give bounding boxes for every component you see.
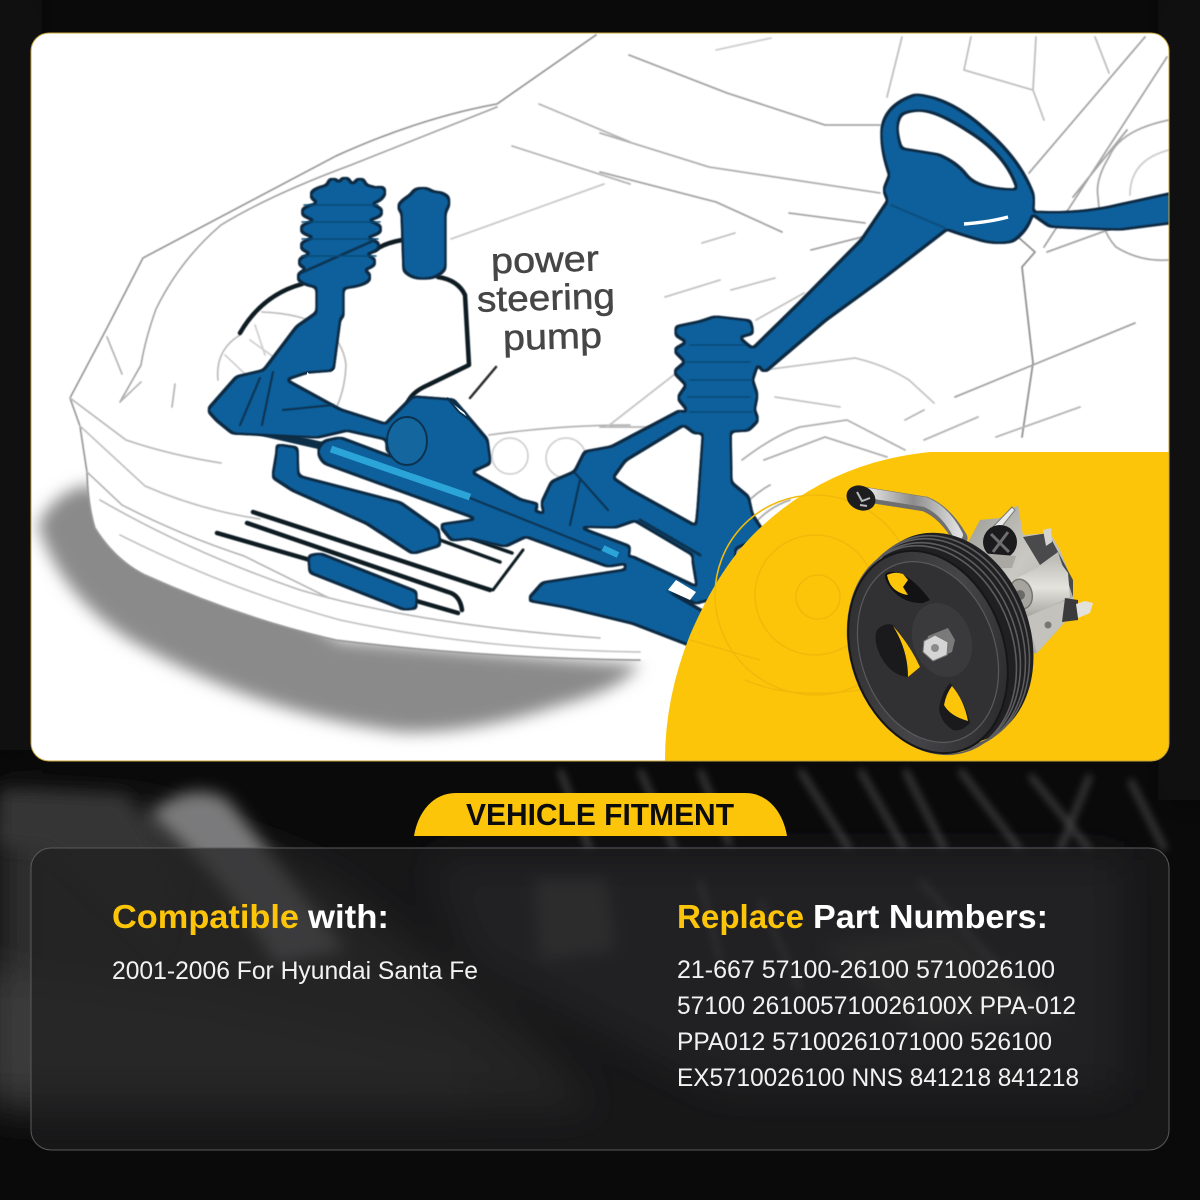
- outlet pipe: [868, 495, 960, 538]
- replacement part numbers block: 21-667 57100-26100 5710026100: [677, 956, 1055, 984]
- panel: vehicle fitment: [31, 793, 1169, 1150]
- right strut: [693, 425, 765, 602]
- heading badge: VEHICLE FITMENT: [466, 797, 734, 832]
- steering column: [750, 175, 960, 372]
- steering system parts: [208, 95, 1175, 648]
- hoses and bars: [217, 240, 523, 613]
- panel: yellow product area: [665, 452, 1172, 778]
- heading badge: [414, 793, 787, 836]
- replacement part numbers block: [677, 898, 1079, 1092]
- compatible block: [112, 898, 478, 985]
- fluid reservoir: [398, 188, 449, 278]
- right column stub: [1030, 193, 1175, 229]
- label: power steering pump: power: [490, 238, 599, 281]
- pulley grooves: [846, 532, 1034, 756]
- replacement part numbers block: EX5710026100 NNS 841218 841218: [677, 1064, 1079, 1092]
- connector: [1043, 528, 1052, 546]
- panel: steering system illustration: [31, 33, 1175, 778]
- pump body: [387, 397, 540, 518]
- filler cap: [983, 525, 1017, 556]
- car shadow: [38, 485, 640, 732]
- tie rod: [625, 556, 702, 604]
- panel border: [31, 33, 1169, 761]
- replacement part numbers block: Part Numbers:: [813, 898, 1048, 935]
- replacement part numbers block: Replace: [677, 898, 804, 935]
- icon: power steering pump: [846, 485, 1093, 756]
- right steering cluster: [542, 410, 702, 556]
- lower-left arm: [273, 453, 440, 553]
- car body outline: [70, 35, 1169, 660]
- compatible block: with:: [307, 898, 389, 935]
- label: power steering pump: pump: [502, 315, 602, 358]
- compatible block: Compatible: [112, 898, 299, 935]
- lower-right arm: [528, 570, 705, 648]
- replacement part numbers block: PPA012 57100261071000 526100: [677, 1028, 1052, 1056]
- label: power steering pump: [478, 251, 613, 358]
- rack highlight: [331, 449, 618, 555]
- pump body: [965, 505, 1073, 655]
- replacement part numbers block: 57100 261005710026100X PPA-012: [677, 992, 1076, 1020]
- pump housing on diagram: [307, 217, 1008, 600]
- left strut: [263, 285, 343, 380]
- steering wheel: [882, 95, 1033, 242]
- label: power steering pump: steering: [476, 275, 615, 320]
- right spring: [674, 317, 758, 433]
- main rack: [319, 438, 630, 566]
- hub nut: [912, 603, 972, 677]
- spoke openings: [885, 572, 930, 603]
- bracket: [992, 506, 1016, 527]
- vertical link: [277, 445, 298, 484]
- compatible block: 2001-2006 For Hyundai Santa Fe: [112, 957, 478, 985]
- pulley face: [847, 550, 1008, 754]
- left gearbox cluster: [208, 370, 387, 439]
- lower lumps: [440, 515, 528, 546]
- bar cylinder: [309, 554, 416, 609]
- part detail lines: [240, 205, 945, 555]
